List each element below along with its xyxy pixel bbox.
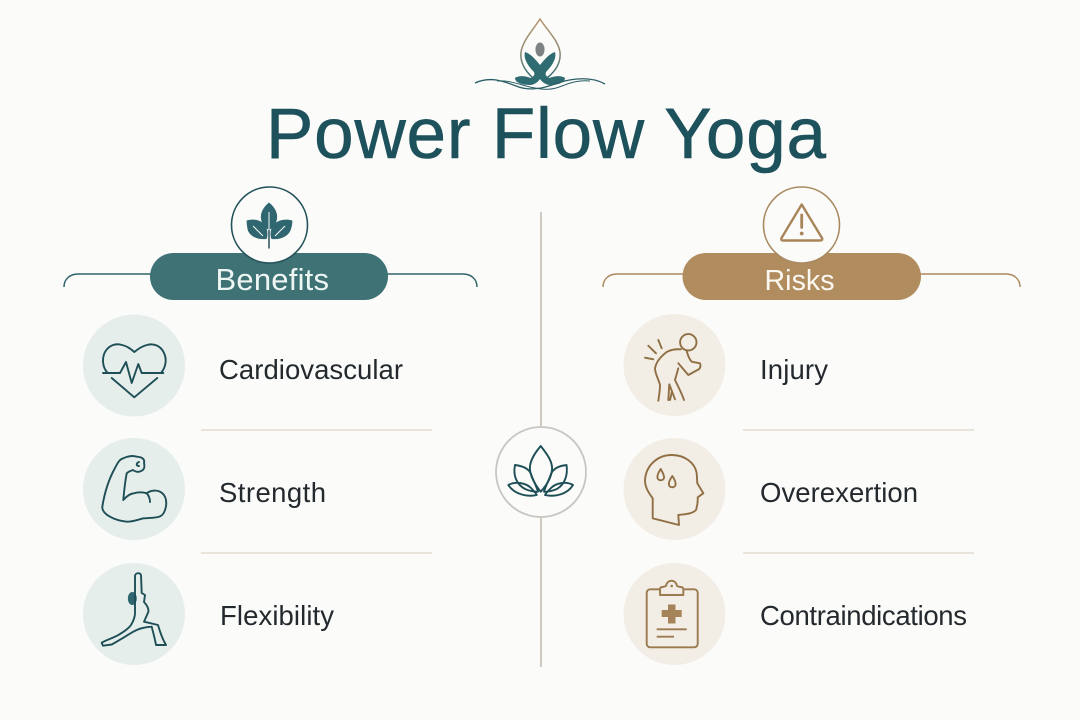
benefits header	[64, 187, 477, 300]
item: strength: Strength	[219, 477, 326, 508]
icon: yoga logo	[475, 19, 605, 89]
item: injury	[624, 314, 828, 416]
title: Power Flow Yoga	[266, 95, 826, 174]
center divider	[496, 212, 586, 667]
item: overexertion: Overexertion	[760, 477, 918, 508]
benefits header: Benefits	[216, 262, 329, 297]
item: flexibility: Flexibility	[220, 600, 334, 631]
panel: risks	[603, 187, 1020, 665]
panel: benefits	[64, 187, 477, 665]
risks header: Risks	[764, 265, 834, 297]
risks header	[603, 187, 1020, 300]
item: cardiovascular: Cardiovascular	[219, 354, 403, 385]
item: overexertion	[624, 438, 918, 540]
item: flexibility	[83, 563, 334, 665]
item: cardiovascular	[83, 314, 403, 416]
item: strength	[83, 438, 326, 540]
item: contraindications	[624, 563, 967, 665]
item: injury: Injury	[760, 354, 828, 385]
item: contraindications: Contraindications	[760, 600, 967, 631]
